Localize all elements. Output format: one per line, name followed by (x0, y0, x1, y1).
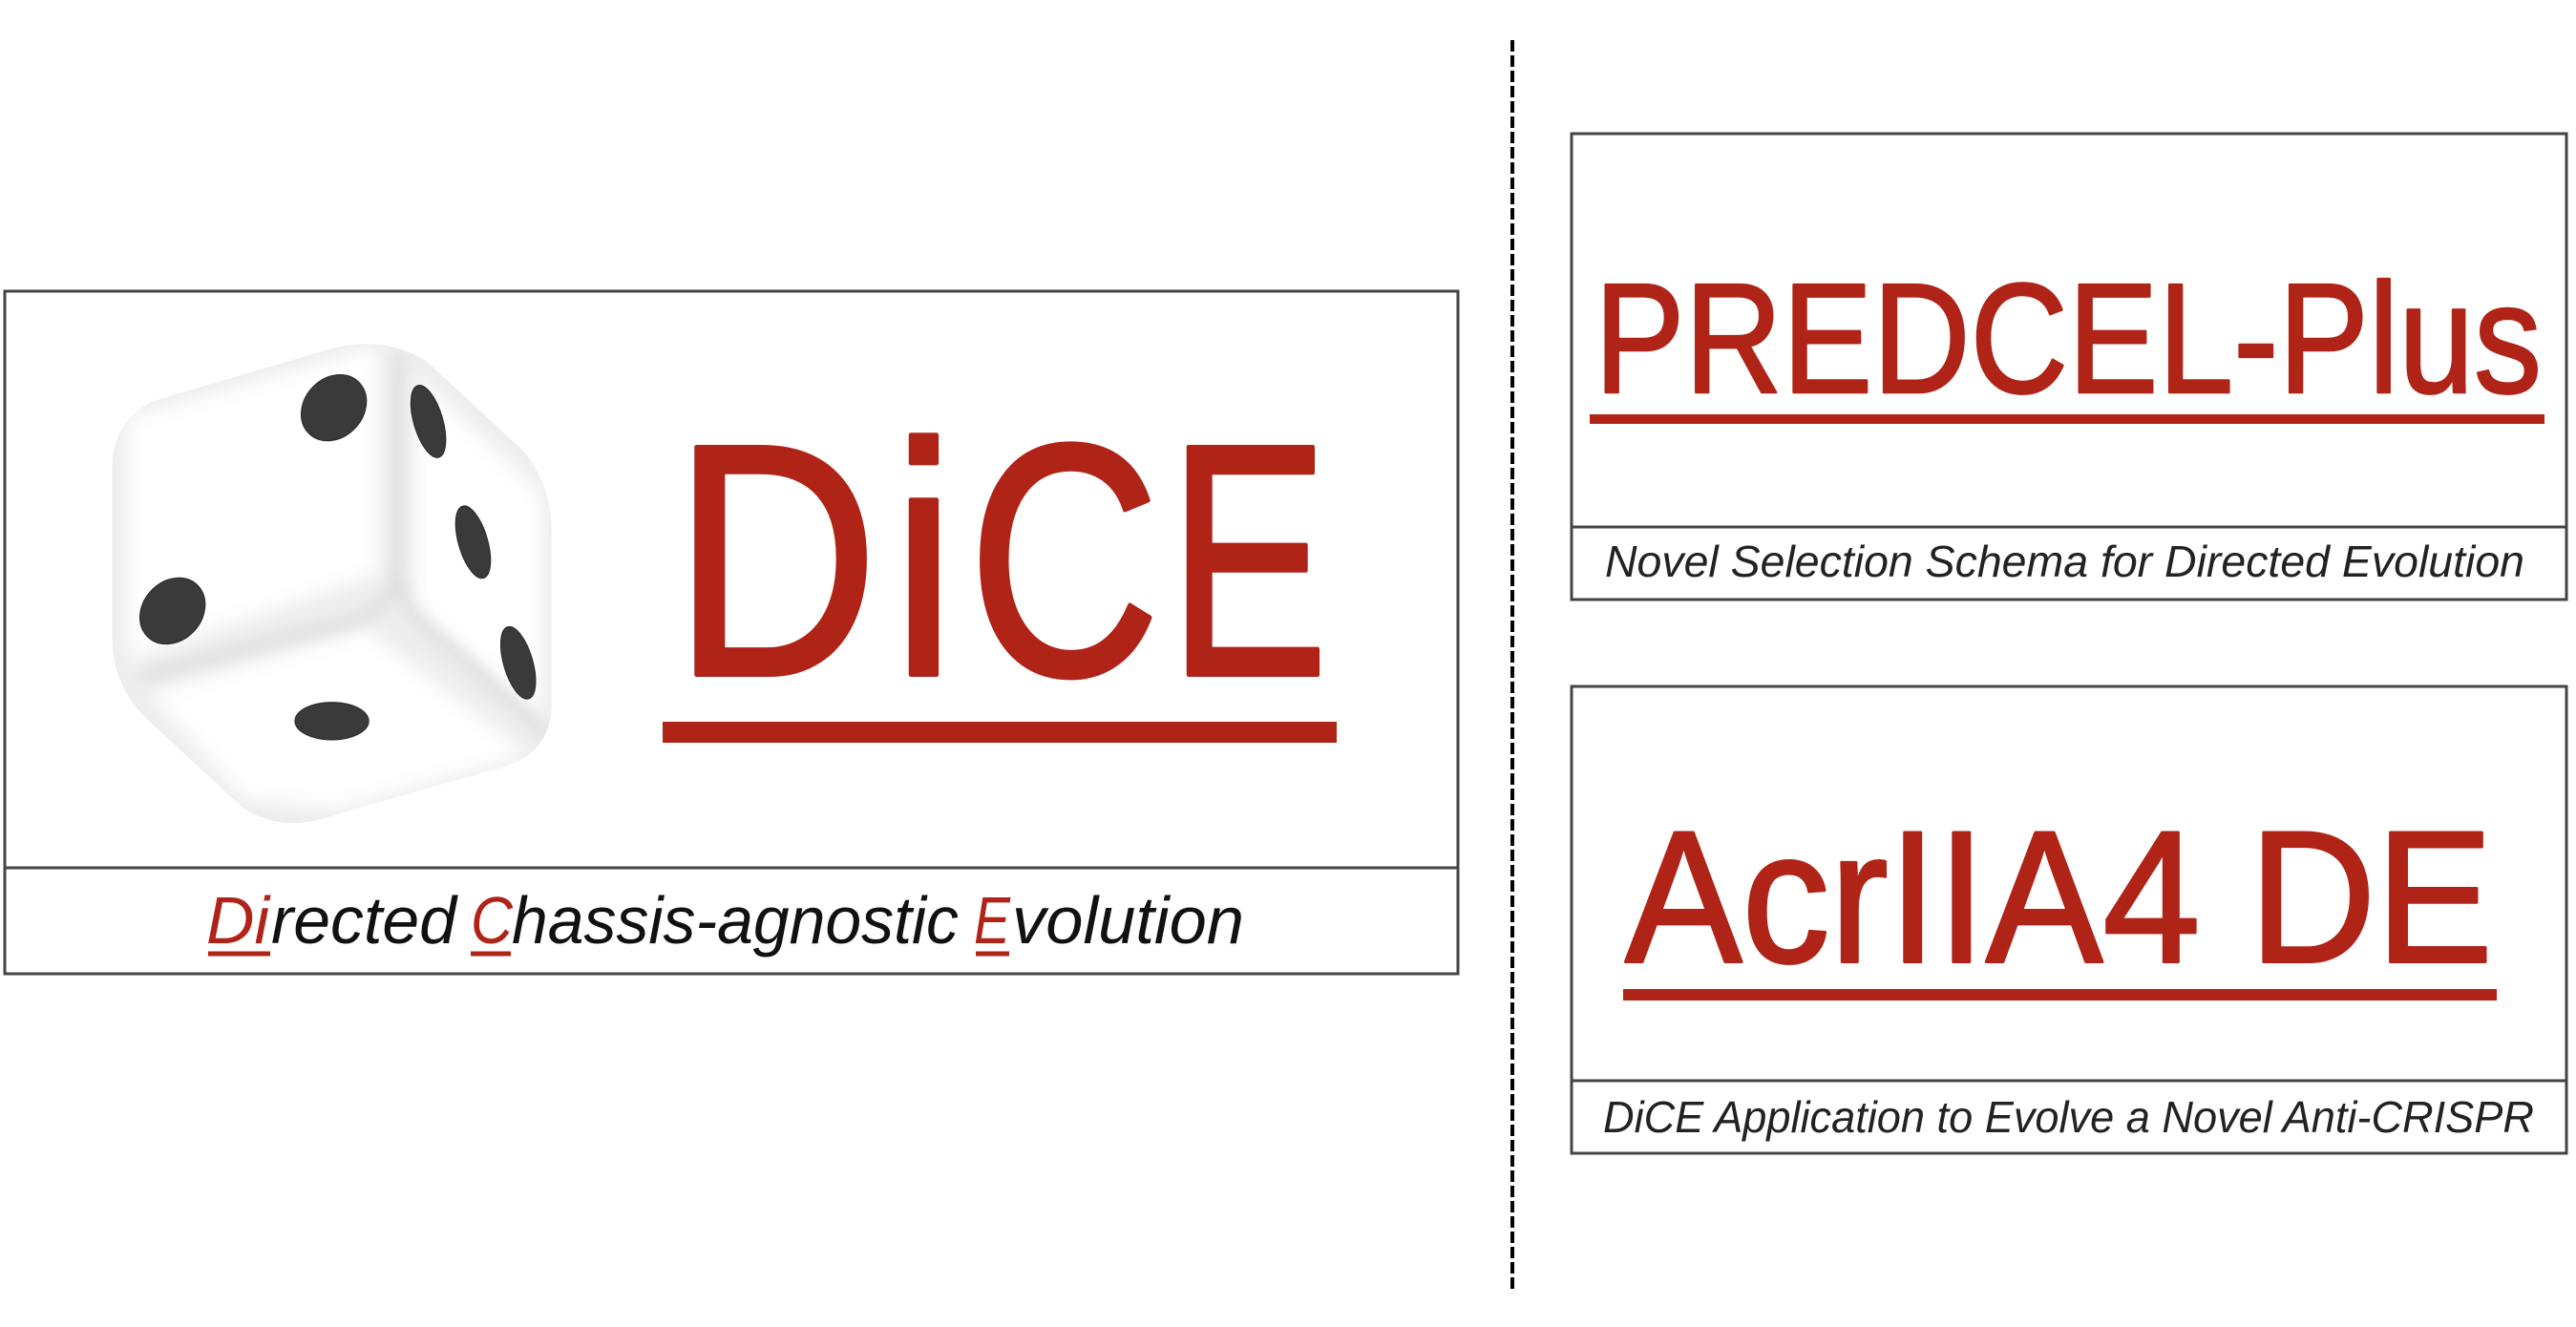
heading: AcrIIA4 DE: AcrIIA4 DE (1625, 792, 2493, 1002)
heading: DiCE: C (968, 376, 1160, 745)
heading: DiCE (673, 376, 1328, 745)
panel frame: DiCE (5, 291, 1458, 974)
caption: DiCE Application to Evolve a Novel Anti-CRISPR: DiCE Application to Evolve a Novel Anti-CRISPR (1603, 1092, 2534, 1142)
caption: Directed Chassis-agnostic Evolution (206, 883, 1244, 958)
caption: Directed Chassis-agnostic Evolution: Di (206, 883, 271, 958)
caption: Directed Chassis-agnostic Evolution: hassis-agnostic (512, 883, 959, 958)
panel: PREDCEL-Plus (1572, 134, 2566, 600)
caption: Directed Chassis-agnostic Evolution: C (471, 883, 513, 958)
icon: white die with black pips (106, 335, 560, 833)
panel: AcrIIA4 DE (1572, 686, 2566, 1153)
caption: Directed Chassis-agnostic Evolution: volution (1012, 883, 1244, 958)
panel: DiCE (5, 291, 1458, 974)
caption: Novel Selection Schema for Directed Evolution: Novel Selection Schema for Directed Evolution (1605, 537, 2524, 586)
heading underline (1623, 989, 2497, 1001)
heading underline (1590, 414, 2544, 424)
caption: Directed Chassis-agnostic Evolution: E (974, 883, 1011, 958)
heading: DiCE: i (892, 376, 957, 745)
vertical dashed divider (1510, 40, 1514, 1289)
heading: DiCE: E (1169, 376, 1328, 745)
heading: DiCE: D (673, 376, 878, 745)
caption: Directed Chassis-agnostic Evolution: rected (271, 883, 458, 958)
heading underline (663, 722, 1337, 743)
panel frame: AcrIIA4 DE (1572, 686, 2566, 1153)
panel frame: PREDCEL-Plus (1572, 134, 2566, 600)
